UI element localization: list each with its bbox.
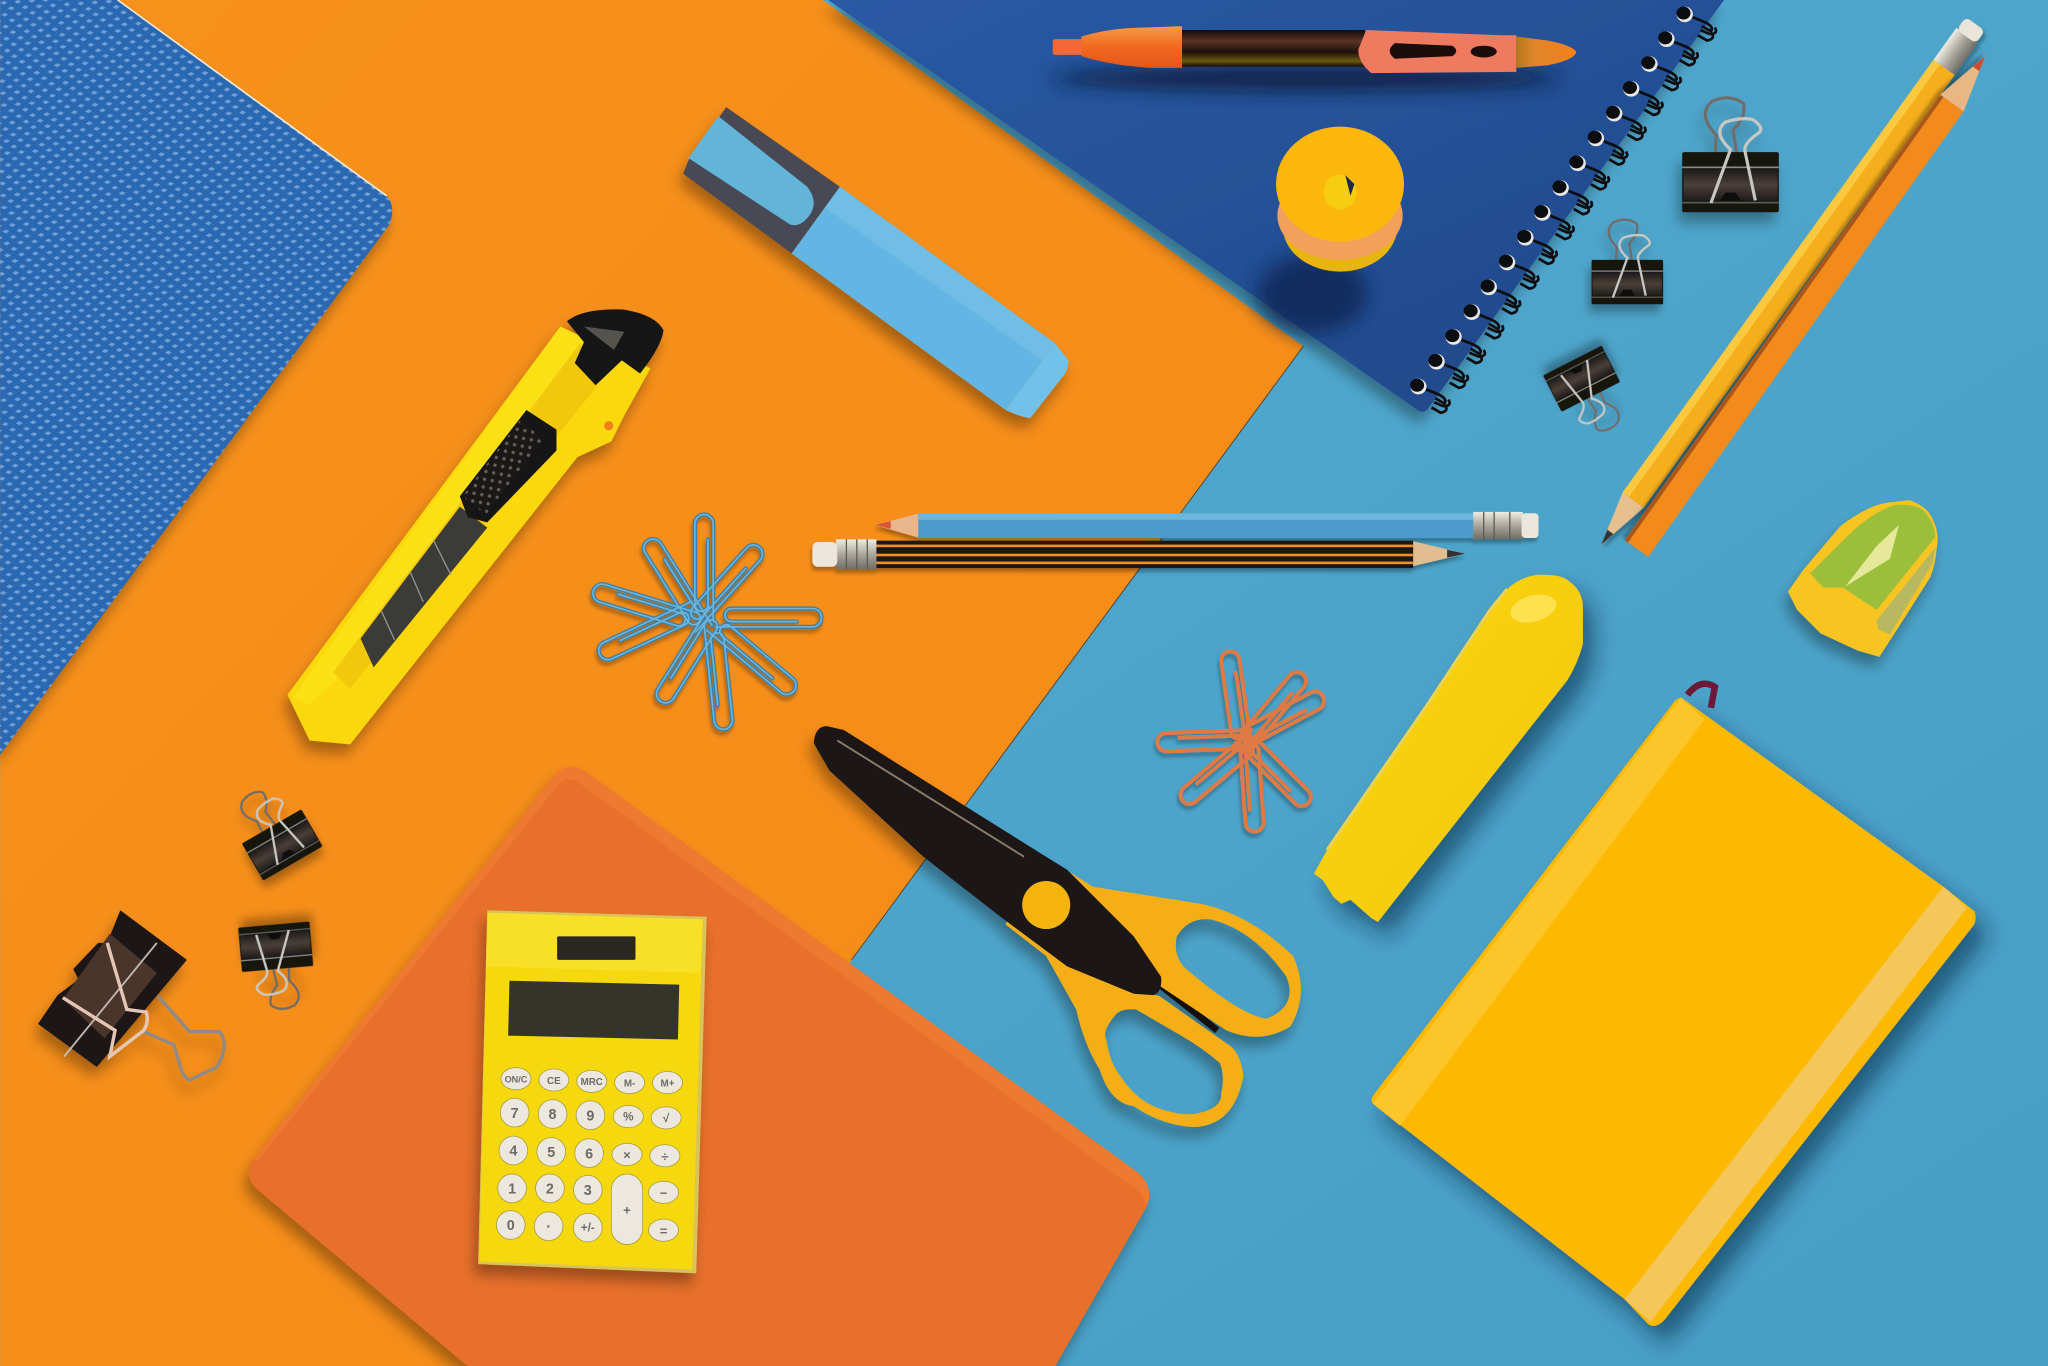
pivot [1022,881,1070,929]
blade [361,507,487,667]
yellow utility knife [287,309,664,744]
binder clip: top right rotated [1543,346,1637,445]
calculator key labels: +/- [581,1221,595,1234]
calculator key labels: √ [663,1112,670,1125]
calculator key labels: % [623,1110,634,1123]
green translucent sharpener [1788,500,1938,657]
black and orange striped pencil [812,539,1465,569]
background: orange paper [0,0,1303,1366]
calculator key labels: CE [547,1076,561,1087]
display [508,981,679,1040]
black zigzag blade [814,726,1161,995]
calculator key labels: 8 [549,1107,557,1123]
solar panel [557,936,635,960]
yellow notebook with elastic band [1372,684,1976,1326]
calculator key labels: 6 [585,1146,593,1162]
calculator keys [496,1068,682,1245]
scissor lower handle [1046,956,1243,1127]
orange pencil [1625,48,1997,557]
yellow orange pencil [1591,16,1986,552]
calculator key labels: 1 [508,1182,516,1198]
binder clip: left middle [238,922,317,1012]
yellow round sharpener [1258,127,1404,333]
black nose cap [567,309,664,385]
calculator key labels: 2 [546,1182,554,1198]
blue paper clips [591,515,822,730]
light blue highlighter [683,107,1068,418]
calculator key labels: ÷ [661,1149,668,1164]
navy spiral notebook [828,0,1724,413]
calculator key labels: 0 [507,1218,515,1234]
calculator key labels: 5 [547,1145,555,1161]
calculator key labels: − [660,1186,668,1201]
blue textured notebook [0,0,392,755]
calculator key labels: + [623,1203,631,1218]
binder clip: top right medium [1592,220,1663,304]
calculator key labels: × [623,1148,631,1163]
ribbon marker [1687,684,1715,708]
calculator key labels: 7 [511,1106,519,1122]
calculator key labels: ON/C [505,1075,528,1085]
notebook spine [1373,697,1704,1126]
binder clip: left upper [223,776,323,881]
yellow calculator [478,910,707,1273]
calculator key labels: 3 [584,1183,592,1199]
calculator key labels: M- [624,1079,635,1090]
slider knob [460,410,556,522]
scissor upper handle [1006,849,1301,1037]
orange notebook [249,767,1149,1366]
orange paper clips [1157,650,1327,832]
calculator key labels: 9 [586,1108,594,1124]
calculator key labels: 4 [509,1144,517,1160]
scissors [814,726,1301,1127]
binder clip: left large [38,910,224,1080]
orange and black pen [1051,26,1576,91]
calculator key labels: M+ [661,1079,675,1090]
blade slot [333,343,597,688]
calculator key labels: MRC [581,1077,603,1088]
calculator key labels: · [546,1219,551,1235]
elastic band [1625,887,1967,1322]
calculator key labels: = [660,1223,668,1238]
blue pencil [875,512,1539,539]
yellow pencil case cap [1314,575,1583,922]
binder clip: top right large [1682,98,1779,212]
scissor inner shank [1161,986,1217,1030]
spiral binding [1410,7,1716,413]
calculator key labels [505,1075,675,1238]
